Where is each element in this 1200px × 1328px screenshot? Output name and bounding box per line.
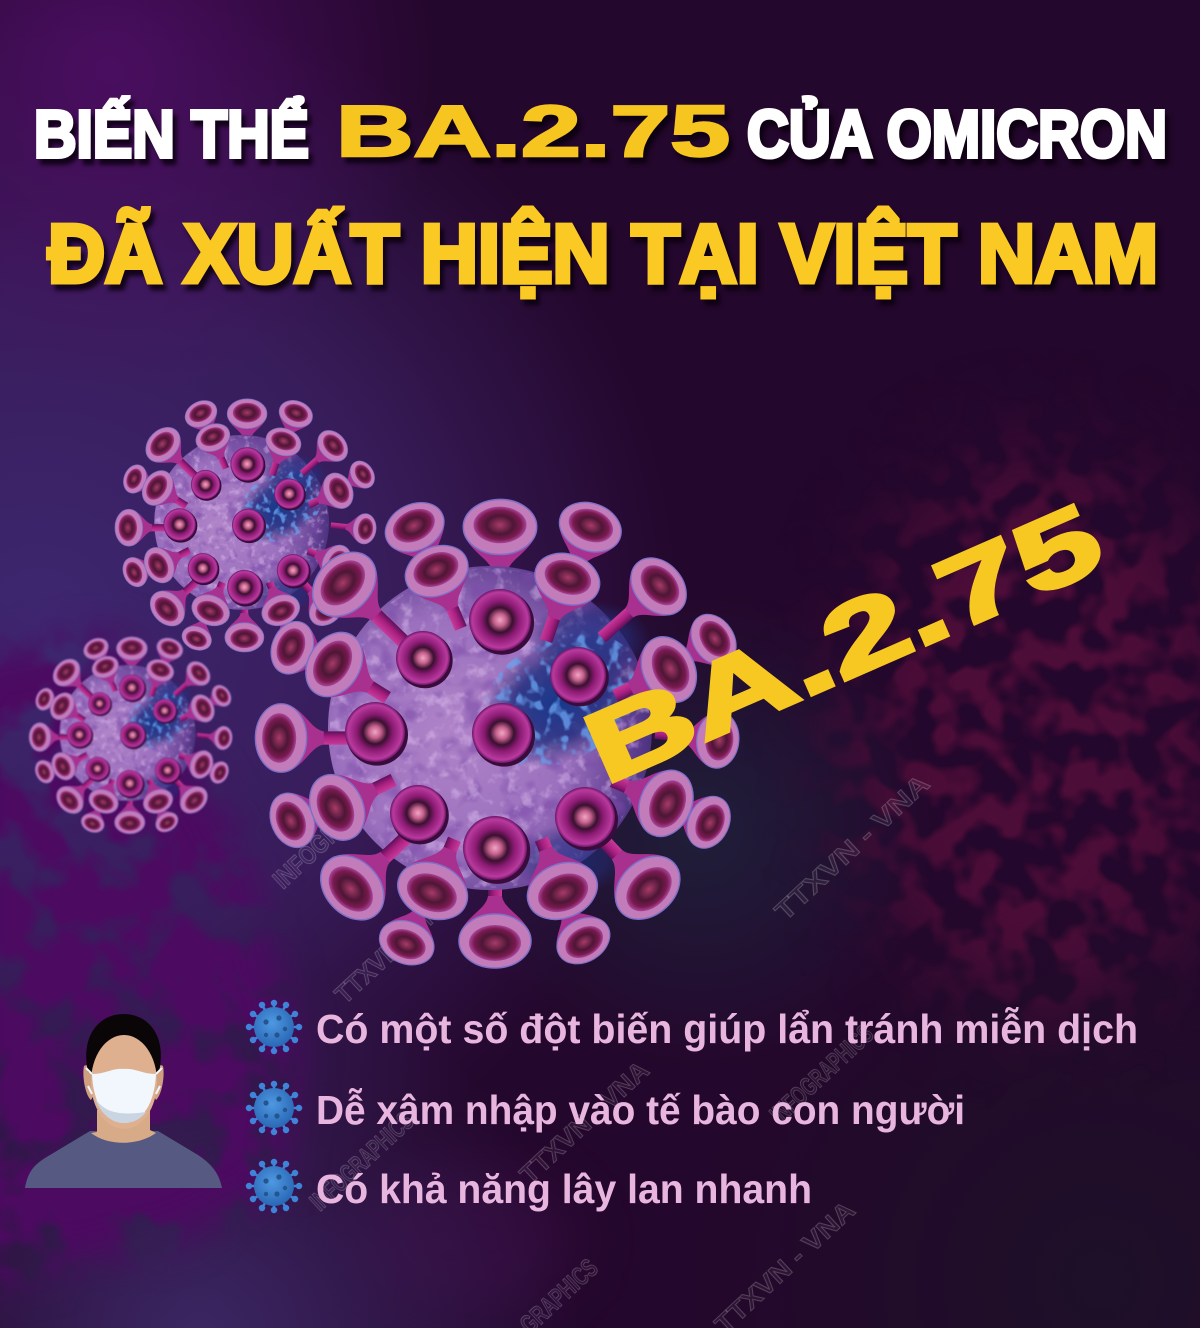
- title line 1: BA.2.75: [336, 92, 730, 172]
- virus: medium upper: [115, 396, 380, 655]
- watermarks: INFOGRAPHICS: [304, 1106, 419, 1216]
- title: [34, 92, 1167, 300]
- bullet 1: Có một số đột biến giúp lẩn tránh miễn dịch: [316, 1006, 1138, 1052]
- watermarks: [267, 763, 936, 1328]
- virus: small far left: [29, 634, 235, 836]
- virus: main large: [255, 493, 745, 973]
- watermarks: INFOGRAPHICS: [267, 763, 404, 894]
- icon: blue virus: [247, 1001, 301, 1053]
- bullet 2: Dễ xâm nhập vào tế bào con người: [316, 1087, 965, 1133]
- ears: [83, 1065, 164, 1100]
- watermarks: TTXVN - VNA: [514, 1055, 655, 1189]
- bullet 3: Có khả năng lây lan nhanh: [316, 1166, 812, 1212]
- face: [91, 1035, 157, 1129]
- masked person: [25, 1014, 222, 1188]
- watermarks: INFOGRAPHICS: [764, 1019, 879, 1129]
- face mask: [86, 1068, 162, 1123]
- icon: blue virus: [247, 1160, 301, 1212]
- title line 1: BIẾN THỂ: [34, 97, 309, 172]
- shoulders: [25, 1131, 222, 1188]
- hair: [86, 1014, 161, 1080]
- icon: blue virus: [247, 1082, 301, 1134]
- title line 2: ĐÃ XUẤT HIỆN TẠI VIỆT NAM: [48, 206, 1158, 300]
- rotated label BA.2.75: BA.2.75: [569, 482, 1118, 805]
- watermarks: TTXVN - VNA: [769, 768, 936, 926]
- watermarks: TTXVN - VNA: [329, 885, 459, 1009]
- title line 1: [34, 92, 1167, 172]
- neck: [91, 1110, 156, 1143]
